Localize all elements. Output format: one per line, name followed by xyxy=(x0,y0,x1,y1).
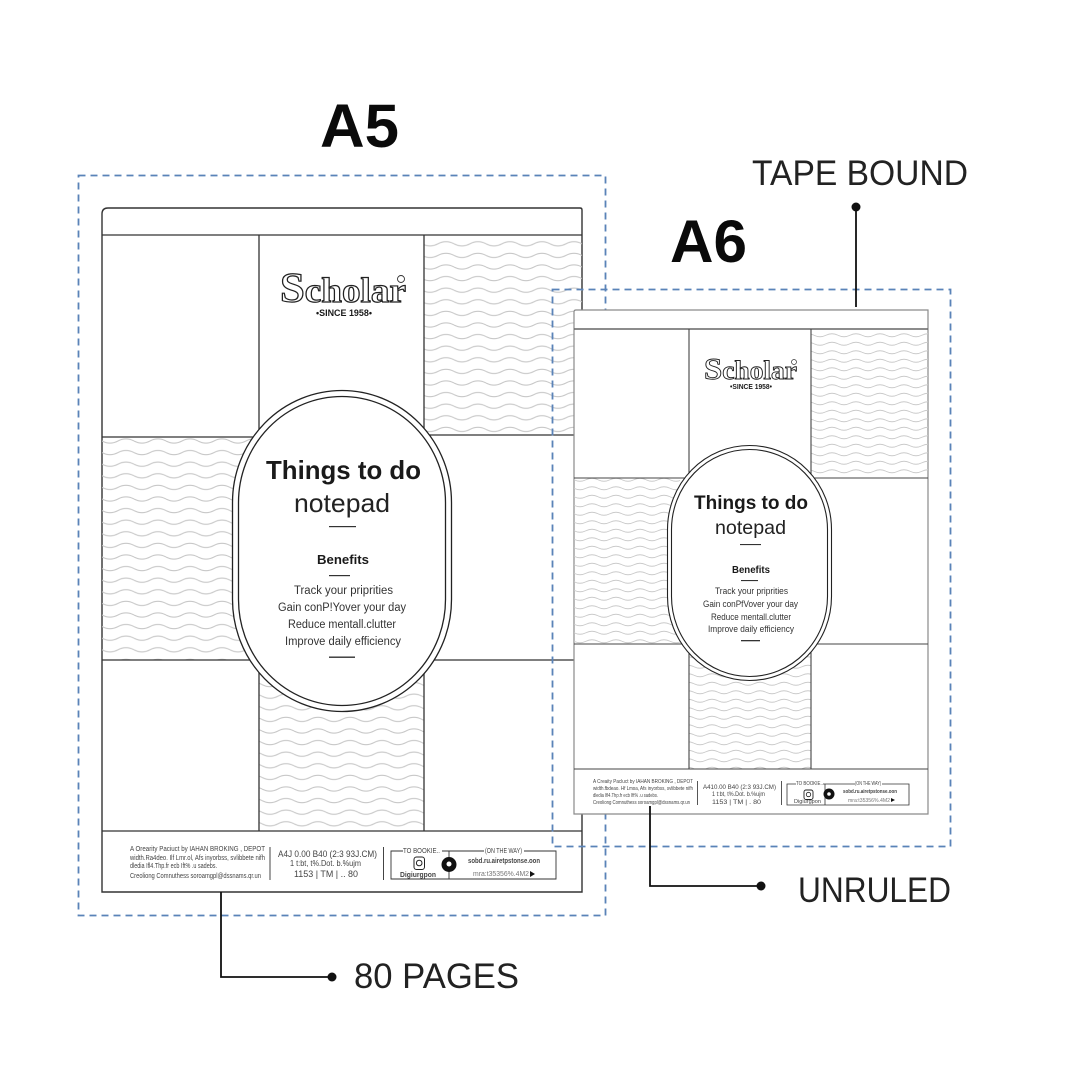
A6 footer imprint: A410.00 B40 (2:3 93J.CM) xyxy=(703,784,776,791)
A6 benefits list: Track your priprities xyxy=(715,586,789,596)
panel: A6 notepad xyxy=(574,310,928,814)
callout: 80 pages xyxy=(221,892,519,996)
A5 footer imprint: width.Ra4deo. Ilf Lmr.ol, Afs inyorbss, svlibbete nifh xyxy=(129,855,265,862)
A5 benefits list: Improve daily efficiency xyxy=(285,636,401,648)
A6 footer imprint: Creoliong Comnuthess soroamgpl@dssnams.qr.un xyxy=(593,800,690,806)
callout: tape bound xyxy=(752,154,968,307)
panel: A5 notepad xyxy=(102,208,582,892)
A5 benefits list: Track your priprities xyxy=(294,585,393,597)
A5 benefits list xyxy=(278,553,406,658)
A6 benefits list: Reduce mentall.clutter xyxy=(711,612,791,622)
A5 footer imprint: 1153 | TM | .. 80 xyxy=(294,869,358,879)
A5 footer imprint: dledia Ifl4.Thp.fr ecb Ift% .u sadebs. xyxy=(130,863,217,870)
A5 oval badge xyxy=(232,390,452,712)
A6 footer imprint xyxy=(593,779,782,806)
A5 footer contact box: Digiurgpon xyxy=(400,872,436,879)
A6 badge title: notepad xyxy=(715,517,786,539)
A5 benefits list: Gain conP!Yover your day xyxy=(278,602,406,614)
A6 logo: Scholar since 1958: •SINCE 1958• xyxy=(730,384,773,391)
callout: 80 pages: 80 PAGES xyxy=(354,957,519,996)
A6 benefits list: Improve daily efficiency xyxy=(708,624,795,634)
A5 benefits list: Reduce mentall.clutter xyxy=(288,619,396,631)
A5 dashed size outline xyxy=(78,176,606,916)
A5 footer contact box: mra:t35356%.4M2 xyxy=(473,871,529,878)
callout: tape bound: TAPE BOUND xyxy=(752,154,968,193)
A6 badge title: Things to do xyxy=(694,492,808,514)
A5 footer imprint: 1 t:bt, t%.Dot. b.%ujm xyxy=(290,859,361,868)
A6 footer contact box: TO BOOKIE.. xyxy=(796,781,823,787)
A6 footer contact box: sobd.ru.airetpstonse.oon xyxy=(843,789,897,795)
A5 logo: Scholar since 1958: •SINCE 1958• xyxy=(316,308,372,318)
A6 wave pattern panels xyxy=(574,329,928,769)
A5 footer imprint xyxy=(129,846,384,880)
A5 badge title: notepad xyxy=(294,488,390,518)
A5 benefits list: Benefits xyxy=(317,553,369,567)
A5 badge title xyxy=(266,455,421,518)
A5 footer contact box xyxy=(391,848,556,879)
A5 wave pattern panels xyxy=(102,235,582,831)
A6 benefits list: Gain conPfVover your day xyxy=(703,599,799,609)
A6 badge title xyxy=(694,492,808,539)
A6 dashed size outline xyxy=(552,290,950,846)
callout: unruled xyxy=(650,806,951,910)
A6 footer imprint: width.fbdeao. Hf Lmoa, Afs inyorbss, svlibbete nifh xyxy=(593,786,693,792)
A6 benefits list xyxy=(703,565,799,641)
A6 page outline xyxy=(574,310,928,814)
A6 footer contact box: mra:t35356%.4M2 xyxy=(848,798,890,804)
A6 footer contact box: (ON THE WAY) xyxy=(855,781,881,787)
A5 badge title: Things to do xyxy=(266,455,421,485)
A5 footer imprint: Creoliong Comnuthess soroamgpl@dssnams.qr.un xyxy=(130,873,261,880)
A6 benefits list: Benefits xyxy=(732,565,770,576)
A5 logo: Scholar since 1958: Scholar xyxy=(280,266,406,312)
A6 footer contact box xyxy=(787,781,909,805)
A6 logo: Scholar since 1958: Scholar xyxy=(704,351,797,386)
A5 footer contact box: TO BOOKIE.. xyxy=(403,848,440,855)
heading: A5: A5 xyxy=(320,92,399,160)
callout: unruled: UNRULED xyxy=(798,871,951,910)
A6 footer contact box: Digiurgpon xyxy=(794,799,821,805)
A6 oval badge xyxy=(668,446,832,680)
A5 footer contact box: sobd.ru.airetpstonse.oon xyxy=(468,858,540,865)
A6 footer imprint: 1153 | TM | . 80 xyxy=(712,799,761,806)
A6 footer imprint: A Creaity Pacluct by IAHAN BROKING , DEPOT xyxy=(593,779,694,785)
A5 footer imprint: A4J 0.00 B40 (2:3 93J.CM) xyxy=(278,849,377,859)
A5 footer contact box: (ON THE WAY) xyxy=(485,848,522,855)
A5 footer imprint: A Orearity Paciuct by IAHAN BROKING , DEPOT xyxy=(130,846,266,853)
A5 page outline xyxy=(102,208,582,892)
A6 footer imprint: 1 t:bt, t%.Dot. b.%ujm xyxy=(712,792,765,798)
A6 footer imprint: dledia Ifl4.Thp.fr ecb Ift% .u sadebs. xyxy=(593,793,658,799)
heading: A6: A6 xyxy=(670,208,747,275)
